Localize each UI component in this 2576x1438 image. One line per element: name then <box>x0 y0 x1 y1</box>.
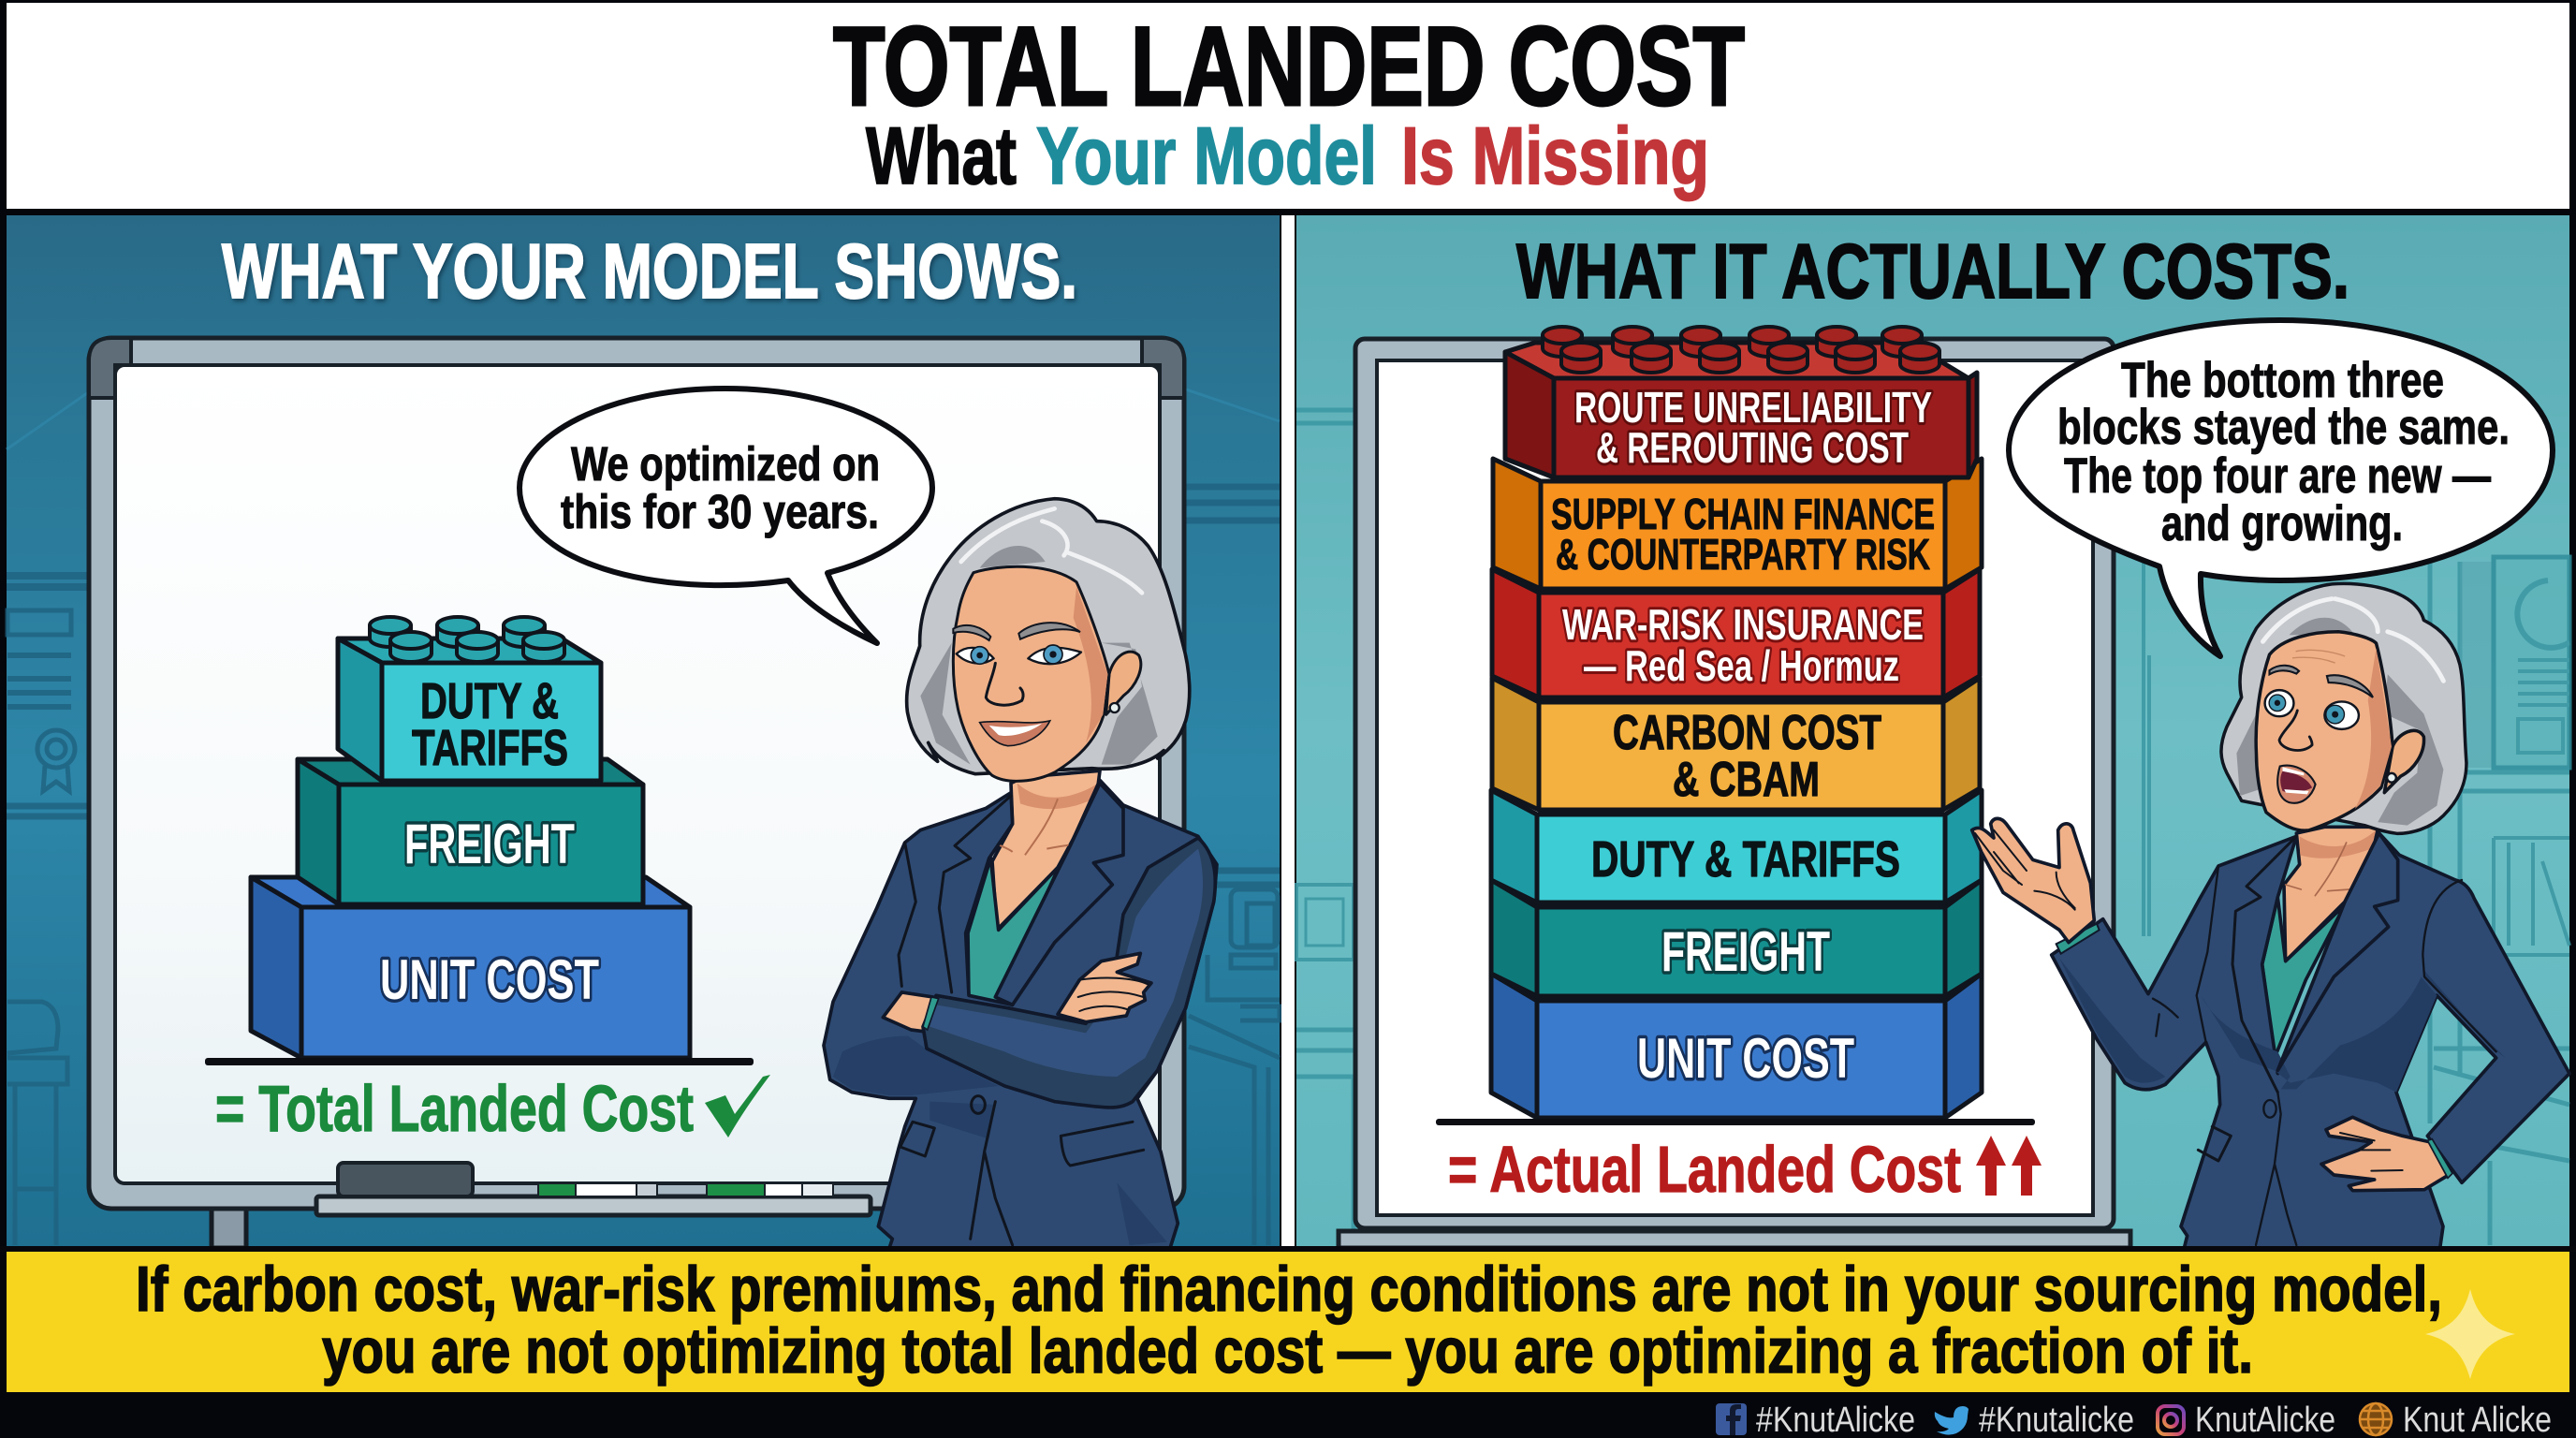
body <box>824 770 1217 1248</box>
panel: what your model shows <box>7 215 1280 1248</box>
block: unit cost <box>1491 974 1982 1118</box>
block: war-risk insurance: — Red Sea / Hormuz <box>1584 641 1899 690</box>
markers <box>538 1183 833 1196</box>
head <box>907 499 1190 781</box>
head <box>2221 583 2466 833</box>
sum line <box>1436 1119 2035 1125</box>
subtitle: Your Model <box>1036 111 1377 201</box>
whiteboard <box>89 338 1184 1248</box>
icon: check mark <box>705 1075 770 1137</box>
subtitle: Is Missing <box>1401 111 1709 201</box>
office background right panel <box>1296 410 2569 1245</box>
block: freight: FREIGHT <box>1661 920 1830 983</box>
total label: = Actual Landed Cost <box>1448 1133 1961 1206</box>
block: carbon cost: & CBAM <box>1673 753 1820 807</box>
icon: sparkle <box>2425 1289 2515 1379</box>
icon: instagram <box>2158 1406 2184 1434</box>
block: route unreliability: ROUTE UNRELIABILITY <box>1574 383 1932 432</box>
eraser <box>338 1163 473 1196</box>
block: supply chain finance: & COUNTERPARTY RISK <box>1556 530 1930 579</box>
whiteboard <box>1339 339 2130 1248</box>
title header <box>7 3 2569 209</box>
block: supply chain finance <box>1493 459 1982 589</box>
takeaway banner <box>0 1246 2576 1392</box>
block: duty and tariffs: DUTY & TARIFFS <box>1591 831 1900 888</box>
studs <box>1543 327 1939 373</box>
presenter: surprised woman <box>1972 583 2569 1248</box>
block: war-risk insurance <box>1492 569 1980 697</box>
subtitle: What <box>866 111 1017 201</box>
icon: twitter <box>1935 1406 1969 1435</box>
block: duty and tariffs <box>338 617 601 781</box>
bubble text: The bottom three <box>2121 353 2444 408</box>
takeaway text: you are not optimizing total landed cost — you are optimizing a fraction of it. <box>322 1315 2253 1387</box>
block: freight <box>298 759 643 904</box>
subtitle <box>866 111 1709 201</box>
block: carbon cost <box>1492 678 1980 810</box>
block: carbon cost: CARBON COST <box>1613 706 1881 760</box>
bubble text: We optimized on <box>571 437 880 491</box>
speech bubble: insight <box>2009 320 2553 656</box>
block: unit cost <box>251 877 690 1058</box>
pen tray <box>316 1163 871 1215</box>
panel: what it actually costs <box>1281 215 2569 1248</box>
bubble text <box>2057 353 2510 551</box>
block: war-risk insurance: WAR-RISK INSURANCE <box>1562 600 1924 649</box>
bubble text: and growing. <box>2161 496 2403 551</box>
takeaway text <box>136 1254 2442 1387</box>
block: route unreliability: & REROUTING COST <box>1596 423 1909 472</box>
block: route unreliability <box>1505 327 1977 477</box>
presenter: confident woman <box>824 499 1217 1248</box>
icon: up arrows <box>1976 1136 2042 1196</box>
bubble text: this for 30 years. <box>561 485 879 538</box>
title: TOTAL LANDED COST <box>833 4 1745 129</box>
block: unit cost: UNIT COST <box>1637 1027 1854 1090</box>
block: freight <box>1491 880 1982 996</box>
block: duty and tariffs: TARIFFS <box>412 720 568 776</box>
cost stack: unit cost, freight, duty <box>251 617 690 1058</box>
icon: globe <box>2360 1403 2392 1435</box>
panel heading: WHAT YOUR MODEL SHOWS. <box>222 227 1077 315</box>
total label: = Total Landed Cost <box>215 1072 694 1145</box>
block: duty and tariffs: DUTY & <box>420 673 559 729</box>
speech bubble: model <box>520 389 932 643</box>
block: unit cost: UNIT COST <box>380 948 599 1011</box>
social footer <box>1716 1401 2552 1438</box>
sum line <box>205 1058 754 1065</box>
panel heading: WHAT IT ACTUALLY COSTS. <box>1516 227 2349 315</box>
body <box>1972 818 2569 1248</box>
cost stack: seven blocks <box>1491 327 1982 1118</box>
studs <box>370 617 564 662</box>
block: supply chain finance: SUPPLY CHAIN FINANCE <box>1551 490 1935 538</box>
office background left panel <box>7 389 1280 1245</box>
icon: facebook <box>1716 1403 1747 1435</box>
block: freight: FREIGHT <box>404 813 575 875</box>
bubble text <box>561 437 880 538</box>
block: duty and tariffs <box>1491 790 1982 902</box>
